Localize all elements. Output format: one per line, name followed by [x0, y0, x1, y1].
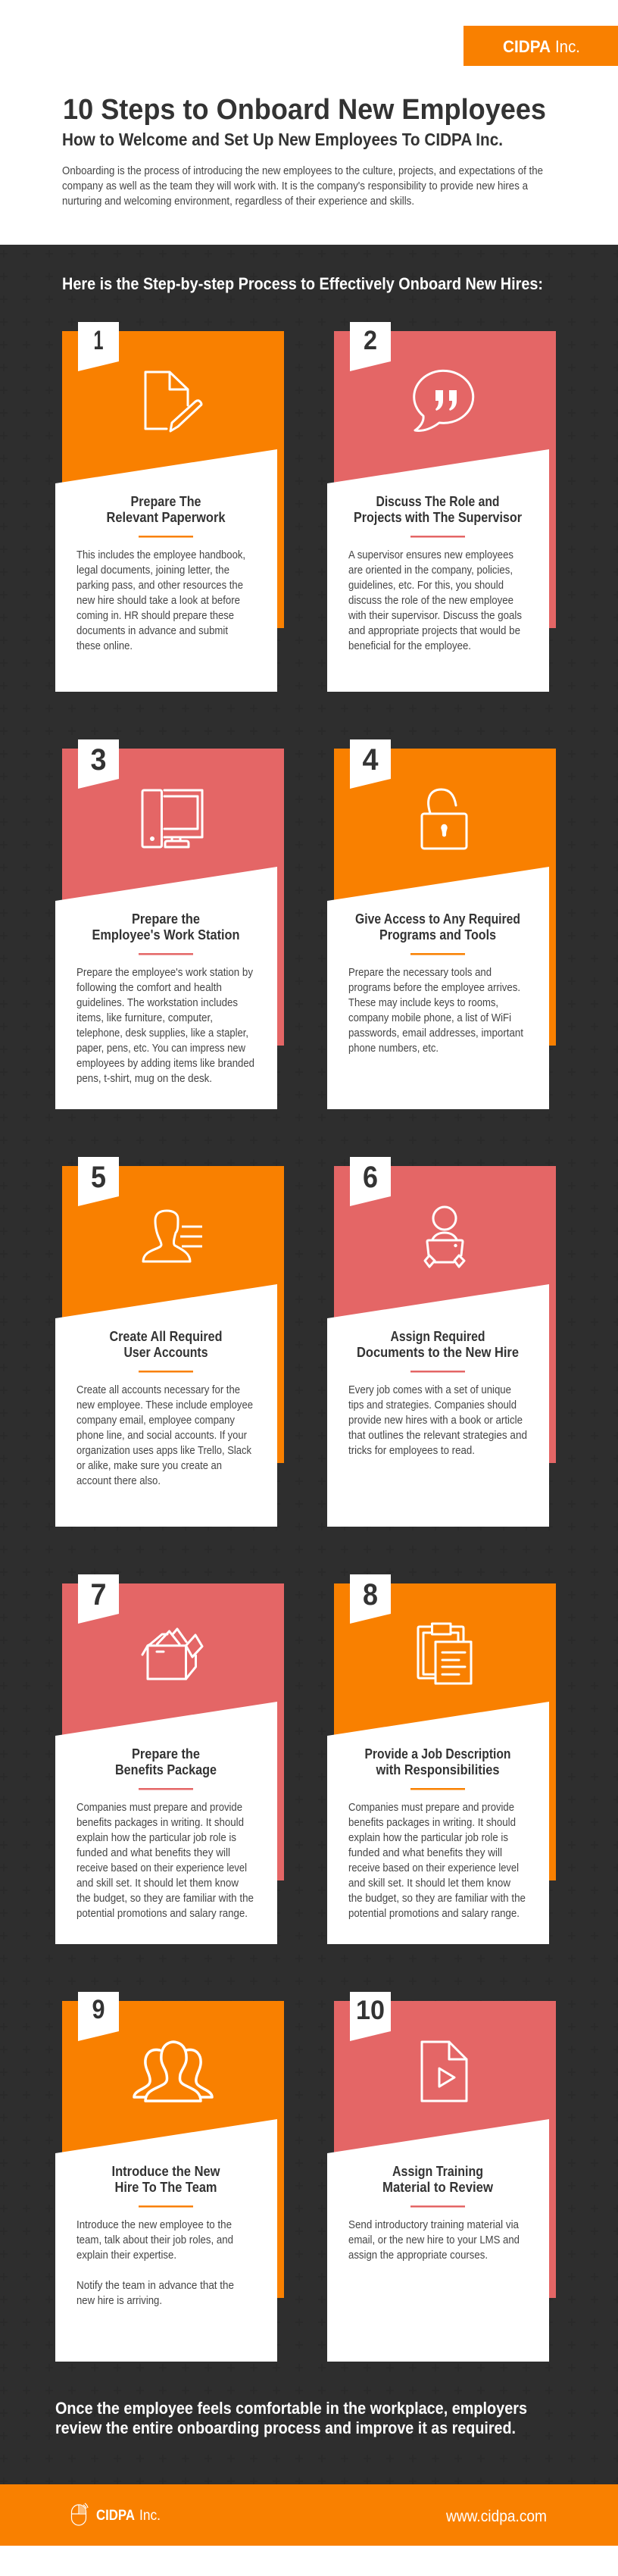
text: step 8: benefits packages in writing. It should	[348, 1816, 516, 1829]
step number 9	[78, 1992, 119, 2041]
panel: step 2	[327, 322, 556, 692]
text: step 5: or alike, make sure you create an	[76, 1459, 222, 1472]
text: step 1: legal documents, joining letter, the	[76, 564, 229, 577]
heading: step 9: Introduce the New	[112, 2163, 220, 2179]
panel: step 4	[327, 739, 556, 1109]
panel: step 10	[327, 1992, 556, 2362]
text: step 1: This includes the employee handbook,	[76, 549, 245, 561]
text: step 1: new hire should take a look at before	[76, 594, 240, 607]
text: step 3: telephone, desk supplies, like a stapler,	[76, 1027, 248, 1039]
step number 2	[350, 322, 391, 371]
step number 4: 4	[362, 743, 379, 777]
text: step 9: Notify the team in advance that the	[76, 2279, 234, 2292]
text: step 3: following the comfort and health	[76, 981, 222, 994]
text: step 7: funded and what benefits they will	[76, 1846, 230, 1859]
step number 6	[350, 1157, 391, 1206]
text: step 1: documents in advance and submit	[76, 624, 229, 637]
heading: step 3	[92, 911, 239, 943]
text: step 1: coming in. HR should prepare these	[76, 609, 234, 622]
panel: step 8	[327, 1574, 556, 1944]
text: step 9: new hire is arriving.	[76, 2294, 162, 2307]
closing statement	[55, 2399, 527, 2437]
closing statement: Once the employee feels comfortable in the workplace, employers	[55, 2399, 527, 2418]
brand badge: CIDPA	[503, 37, 551, 56]
text: step 8: and skill set. It should let them know	[348, 1877, 510, 1890]
step number 3	[78, 739, 119, 789]
closing statement: review the entire onboarding process and improve it as required.	[55, 2418, 516, 2437]
step number 1: 1	[94, 326, 103, 355]
text: step 7: explain how the particular job role is	[76, 1831, 236, 1844]
text: step 7: receive based on their experience level	[76, 1862, 247, 1874]
text: step 4: programs before the employee arrives.	[348, 981, 520, 994]
panel: step 5	[55, 1157, 284, 1527]
text: step 2: and appropriate projects that would be	[348, 624, 520, 637]
text: step 3: items, like furniture, computer,	[76, 1011, 213, 1024]
intro text: Onboarding is the process of introducing the new employees to the culture, projects, and expectations of the	[62, 164, 543, 177]
icon: video file	[422, 2042, 467, 2101]
panel: step 7	[55, 1574, 284, 1944]
icon: user account	[143, 1211, 202, 1261]
text: step 5: Create all accounts necessary for the	[76, 1383, 240, 1396]
icon: person with laptop	[425, 1207, 464, 1267]
text: step 7: the budget, so they are familiar with the	[76, 1892, 254, 1905]
text: step 3: paper, pens, etc. You can impress new	[76, 1042, 245, 1055]
text: step 10	[348, 2218, 520, 2262]
text: step 9: team, talk about their job roles, and	[76, 2234, 233, 2246]
text: step 4: passwords, email addresses, important	[348, 1027, 524, 1039]
text: step 8: funded and what benefits they will	[348, 1846, 502, 1859]
heading: step 4: Programs and Tools	[379, 927, 496, 943]
step number 5: 5	[91, 1161, 106, 1194]
text: step 6: that outlines the relevant strategies and	[348, 1429, 527, 1442]
step number 3: 3	[91, 743, 106, 777]
text: step 9: explain their expertise.	[76, 2249, 176, 2262]
panel: step 9	[55, 1992, 284, 2362]
heading: step 6: Documents to the New Hire	[357, 1344, 519, 1360]
text: step 8: explain how the particular job role is	[348, 1831, 508, 1844]
intro text	[62, 164, 543, 208]
step number 4	[350, 739, 391, 789]
heading: step 5: Create All Required	[109, 1328, 223, 1344]
subtitle: How to Welcome and Set Up New Employees To CIDPA Inc.	[62, 130, 503, 149]
intro text: company as well as the team they will work with. It is the company's responsibility to provide new hires a	[62, 180, 529, 192]
heading: step 8: with Responsibilities	[376, 1762, 499, 1777]
text: step 5: company email, employee company	[76, 1414, 235, 1427]
text: step 3: pens, t-shirt, mug on the desk.	[76, 1072, 212, 1085]
heading: step 4	[355, 911, 520, 943]
step number 7: 7	[91, 1578, 106, 1612]
heading: step 3: Employee's Work Station	[92, 927, 239, 943]
text: step 10: email, or the new hire to your LMS and	[348, 2234, 520, 2246]
text: step 2: discuss the role of the new employee	[348, 594, 513, 607]
text: step 8	[348, 1801, 526, 1920]
text: step 2: with their supervisor. Discuss the goals	[348, 609, 522, 622]
text: step 2: A supervisor ensures new employees	[348, 549, 513, 561]
icon: speech bubble	[414, 370, 473, 430]
text: step 3	[76, 966, 254, 1085]
text: step 7: potential promotions and salary range.	[76, 1907, 248, 1920]
icon: team of people	[134, 2042, 212, 2101]
section heading: Here is the Step-by-step Process to Effectively Onboard New Hires:	[62, 274, 543, 293]
step number 10: 10	[356, 1996, 385, 2025]
text: step 2: guidelines, etc. For this, you should	[348, 579, 504, 592]
heading: step 2: Projects with The Supervisor	[354, 509, 522, 525]
heading: step 6: Assign Required	[391, 1328, 485, 1344]
heading: step 8	[365, 1746, 510, 1777]
heading: step 1: Prepare The	[130, 493, 201, 509]
footer: www.cidpa.com	[445, 2508, 547, 2525]
step number 8	[350, 1574, 391, 1624]
step number 6: 6	[363, 1161, 378, 1194]
text: step 5	[76, 1383, 253, 1487]
text: step 2	[348, 549, 522, 652]
icon: open padlock	[422, 789, 467, 849]
text: step 5: organization uses apps like Trello, Slack	[76, 1444, 251, 1457]
step number 10	[350, 1992, 391, 2041]
text: step 10: Send introductory training material via	[348, 2218, 520, 2231]
text: step 3: employees by adding items like branded	[76, 1057, 254, 1070]
text: step 8: Companies must prepare and provide	[348, 1801, 514, 1814]
panel: step 1	[55, 322, 284, 692]
panel: step 3	[55, 739, 284, 1109]
text: step 7: benefits packages in writing. It should	[76, 1816, 244, 1829]
heading: step 6	[357, 1328, 519, 1360]
step number 1	[78, 322, 119, 371]
text: step 4	[348, 966, 524, 1055]
heading: step 1: Relevant Paperwork	[106, 509, 226, 525]
text: step 4: phone numbers, etc.	[348, 1042, 439, 1055]
text: step 5: new employee. These include employee	[76, 1399, 253, 1411]
heading: step 7: Prepare the	[132, 1746, 200, 1762]
text: step 6: tips and strategies. Companies should	[348, 1399, 517, 1411]
icon: document and pencil	[145, 372, 201, 431]
heading: step 7: Benefits Package	[115, 1762, 217, 1777]
heading: step 1	[106, 493, 226, 525]
icon: clipboard and sheet	[418, 1624, 471, 1683]
text: step 2: are oriented in the company, policies,	[348, 564, 513, 577]
footer	[0, 2484, 618, 2546]
text: step 1: these online.	[76, 639, 133, 652]
text: step 8: potential promotions and salary range.	[348, 1907, 520, 1920]
heading: step 2: Discuss The Role and	[376, 493, 500, 509]
heading: step 5	[109, 1328, 223, 1360]
heading: step 8: Provide a Job Description	[365, 1746, 510, 1762]
text: step 8: the budget, so they are familiar with the	[348, 1892, 526, 1905]
title: 10 Steps to Onboard New Employees	[63, 94, 546, 126]
footer: Inc.	[139, 2508, 161, 2524]
brand badge	[464, 26, 618, 66]
text: step 1: parking pass, and other resources the	[76, 579, 243, 592]
brand badge: Inc.	[555, 37, 580, 56]
heading: step 3: Prepare the	[132, 911, 200, 927]
text: step 6: provide new hires with a book or article	[348, 1414, 523, 1427]
text: step 3: Prepare the employee's work station by	[76, 966, 253, 979]
text: step 5: account there also.	[76, 1474, 161, 1487]
step number 8: 8	[363, 1578, 378, 1612]
heading: step 4: Give Access to Any Required	[355, 911, 520, 927]
text: step 7: Companies must prepare and provide	[76, 1801, 242, 1814]
text: step 8: receive based on their experience level	[348, 1862, 519, 1874]
icon: open box	[142, 1629, 202, 1679]
text: step 7: and skill set. It should let them know	[76, 1877, 239, 1890]
footer: CIDPA	[96, 2508, 135, 2524]
text: step 9: Introduce the new employee to the	[76, 2218, 232, 2231]
text: step 4: Prepare the necessary tools and	[348, 966, 492, 979]
step number 5	[78, 1157, 119, 1206]
text: step 4: These may include keys to rooms,	[348, 996, 498, 1009]
heading: step 10: Assign Training	[392, 2163, 483, 2179]
text: step 2: beneficial for the employee.	[348, 639, 471, 652]
text: step 3: guidelines. The workstation includes	[76, 996, 238, 1009]
text: step 6: Every job comes with a set of unique	[348, 1383, 511, 1396]
text: step 9	[76, 2218, 234, 2307]
text: step 1	[76, 549, 245, 652]
heading: step 2	[354, 493, 522, 525]
text: step 6: tricks for employees to read.	[348, 1444, 475, 1457]
text: step 10: assign the appropriate courses.	[348, 2249, 488, 2262]
heading: step 10	[382, 2163, 494, 2195]
panel: step 6	[327, 1157, 556, 1527]
heading: step 9	[112, 2163, 220, 2195]
icon: mouse logo	[71, 2503, 88, 2525]
step number 2: 2	[364, 326, 377, 355]
text: step 6	[348, 1383, 527, 1457]
heading: step 5: User Accounts	[124, 1344, 208, 1360]
text: step 4: company mobile phone, a list of WiFi	[348, 1011, 511, 1024]
heading: step 10: Material to Review	[382, 2179, 494, 2195]
heading: step 7	[115, 1746, 217, 1777]
text: step 5: phone line, and social accounts. If your	[76, 1429, 247, 1442]
icon: desktop computer	[142, 790, 202, 847]
text: step 7	[76, 1801, 254, 1920]
intro text: nurturing and welcoming environment, regardless of their experience and skills.	[62, 195, 414, 208]
step number 7	[78, 1574, 119, 1624]
step number 9: 9	[92, 1995, 105, 2024]
heading: step 9: Hire To The Team	[115, 2179, 217, 2195]
